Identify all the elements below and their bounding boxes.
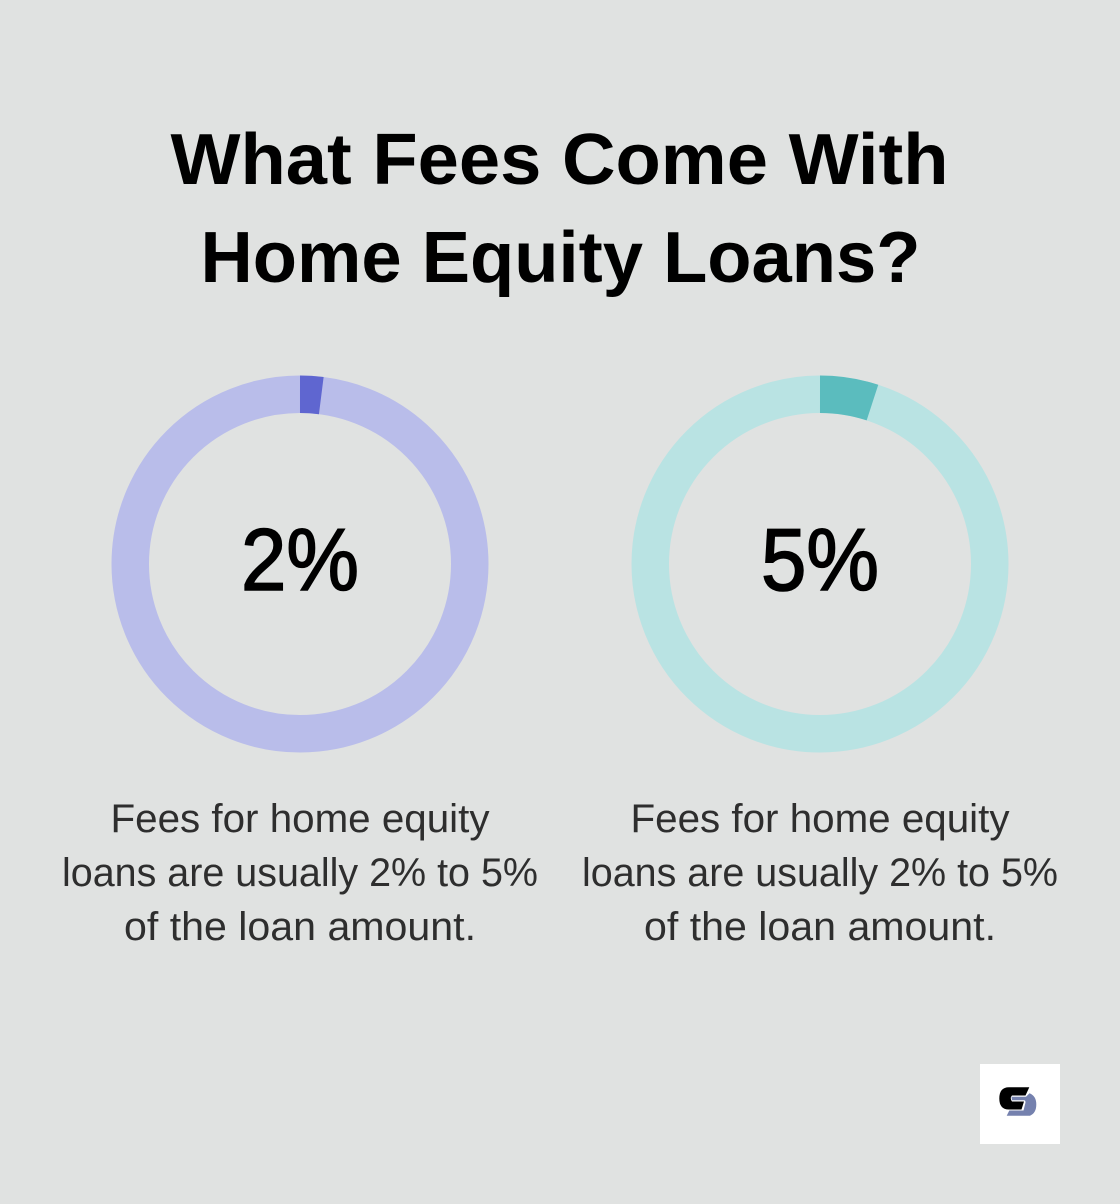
description: 2% card [62, 797, 538, 949]
description: 2% card: of the loan amount. [124, 905, 476, 949]
title [170, 120, 948, 298]
value: 5%: 5% [761, 510, 879, 609]
donut chart: 2% [130, 394, 470, 734]
description: 2% card: Fees for home equity [110, 797, 490, 841]
description: 5% card: loans are usually 2% to 5% [582, 851, 1058, 895]
logo [980, 1064, 1060, 1144]
description: 5% card [582, 797, 1058, 949]
value: 2%: 2% [241, 510, 359, 609]
description: 2% card: loans are usually 2% to 5% [62, 851, 538, 895]
panel: 2% stat [62, 394, 538, 949]
title: What Fees Come With [170, 120, 948, 200]
panel: 5% stat [582, 394, 1058, 949]
donut chart: 5% [650, 394, 990, 734]
title: Home Equity Loans? [200, 218, 920, 298]
description: 5% card: Fees for home equity [630, 797, 1010, 841]
description: 5% card: of the loan amount. [644, 905, 996, 949]
